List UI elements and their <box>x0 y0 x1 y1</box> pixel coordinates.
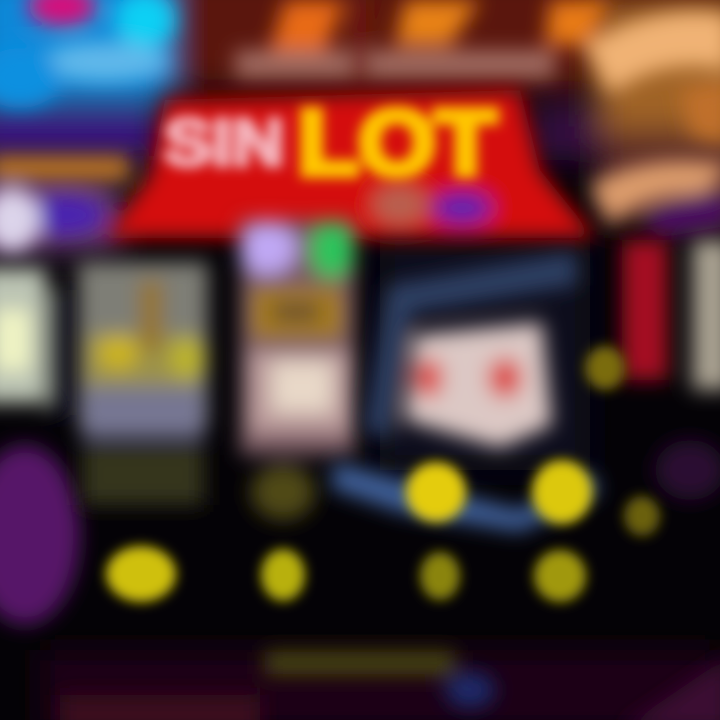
lights: top orange strokes and grey band <box>235 0 720 238</box>
sign: lettering: SIN <box>164 105 284 179</box>
slot machine: left <box>78 262 208 505</box>
slot machine: centre <box>240 220 355 520</box>
sign: lettering <box>164 92 496 194</box>
sign: red banner <box>0 90 595 252</box>
buttons: yellow lights <box>106 346 660 602</box>
lights: top left blue and magenta <box>0 0 175 108</box>
slot machine: right foreground <box>330 240 720 532</box>
foreground: lower console <box>60 440 720 720</box>
slot machine: far left <box>0 268 80 625</box>
sign: lettering: LOT <box>298 92 496 194</box>
